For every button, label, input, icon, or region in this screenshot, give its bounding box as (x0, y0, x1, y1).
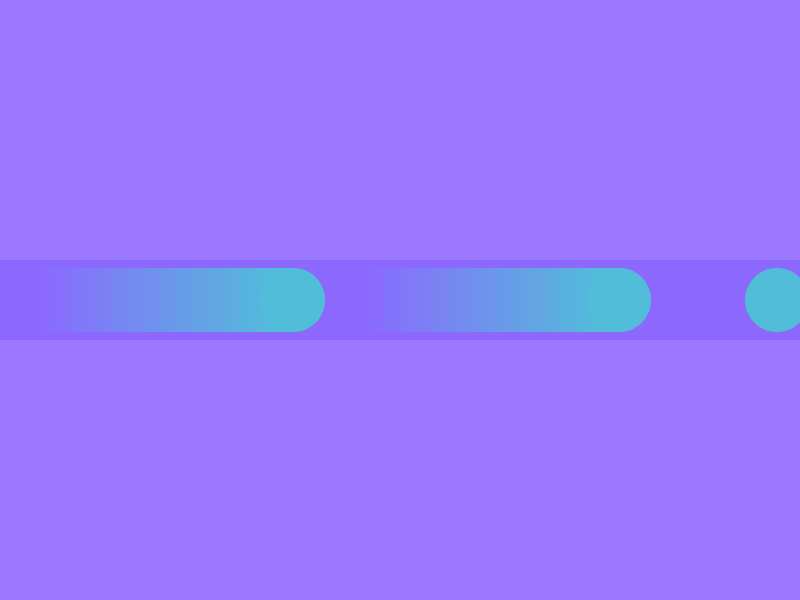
pill 2 with gradient trail (362, 268, 651, 332)
circle 3 at right edge (745, 268, 800, 332)
pill 1 with gradient trail (36, 268, 325, 332)
horizontal band (0, 260, 800, 340)
